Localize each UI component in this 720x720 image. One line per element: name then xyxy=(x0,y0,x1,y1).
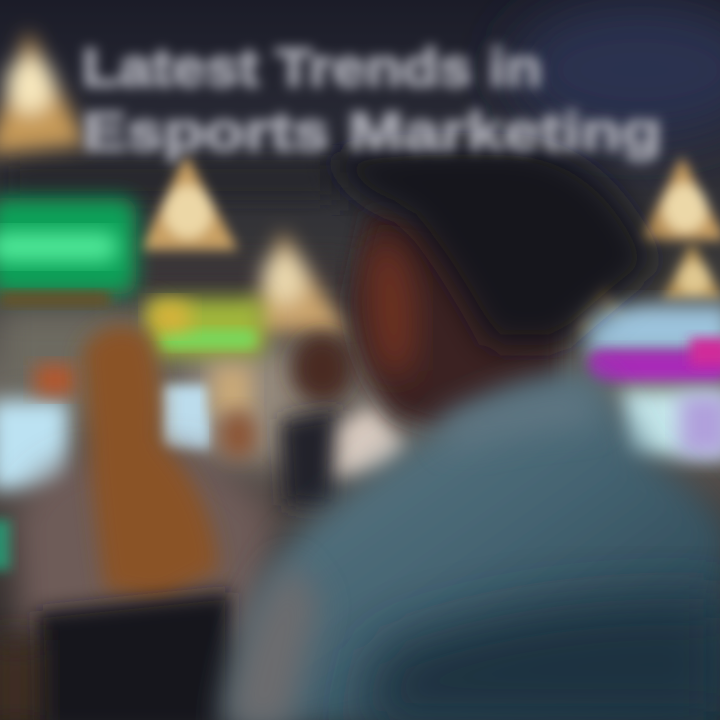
title: Esports Marketing xyxy=(82,102,662,162)
panel: bright screen left xyxy=(0,365,75,570)
title: Latest Trends in xyxy=(82,38,542,98)
left audience member xyxy=(0,325,275,720)
icon: pendant lamp right xyxy=(640,156,720,240)
panel: magenta neon sign xyxy=(585,305,720,382)
long hair xyxy=(82,325,218,600)
icon: pendant lamp lower centre xyxy=(245,230,350,334)
lower left xyxy=(0,640,40,720)
title xyxy=(82,38,662,162)
shirt xyxy=(225,374,720,720)
panel: bright screen centre xyxy=(160,365,252,451)
middle audience member xyxy=(220,334,410,510)
icon: pendant lamp top left xyxy=(0,30,88,155)
panel: bright screen right xyxy=(620,390,720,458)
body xyxy=(15,450,275,640)
panel: green neon sign xyxy=(0,198,136,306)
icon: pendant lamp far right xyxy=(662,242,720,300)
face and neck xyxy=(350,210,560,430)
dark hair / hat xyxy=(330,144,655,345)
chair xyxy=(36,592,232,720)
icon: pendant lamp centre xyxy=(140,154,238,250)
panel: yellow-green neon sign xyxy=(148,298,264,356)
foreground person xyxy=(225,144,720,720)
icon: small pendant lamp xyxy=(572,280,630,330)
